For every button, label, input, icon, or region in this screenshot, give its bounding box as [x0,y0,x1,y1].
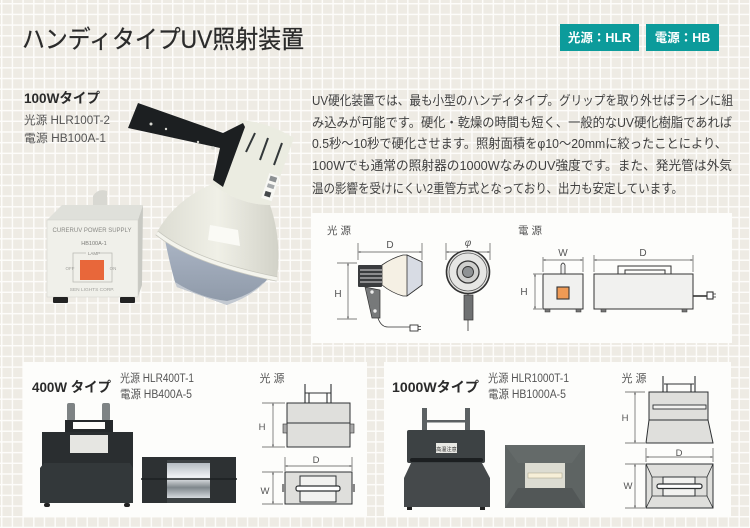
description text: み込みが可能です。硬化・乾燥の時間も短く、一般的なUV硬化樹脂であれば [312,115,732,130]
body cylinder [212,120,294,205]
diagram: lamp front view [446,238,490,331]
label: light source: 光 源 [259,371,285,385]
description text: 0.5秒～10秒で硬化させます。照射面積をφ10～20mmに絞ったことにより、 [312,136,727,151]
badge: power supply HB: 電源：HB [655,30,710,45]
diagram: 400W top view: W [261,486,270,497]
photo: 1000W lamp front [404,408,490,510]
dome [157,184,278,278]
diagram: lamp front view: φ [465,238,472,249]
diagram: 400W side view [259,384,354,447]
model numbers: 100W [24,113,110,145]
description text: 温の影響を受けにくい2重管方式となっており、出力も安定しています。 [312,181,683,196]
dome highlight [208,225,240,246]
photo: 400W lamp opening [141,457,237,503]
diagram: power supply front: W [558,248,568,259]
handle [128,103,245,187]
model numbers: 400W [120,371,194,401]
heading: 400W type: 400W タイプ [32,379,111,395]
diagram: 1000W top view: W [624,481,633,492]
handle screws [150,122,215,150]
photo: 100W power supply [47,190,143,303]
photo: 100W power supply: CURERUV POWER SUPPLY [53,228,131,234]
model numbers: 400W: 光源 HLR400T-1 [120,371,194,385]
diagram: 1000W top view [624,448,713,508]
diagram: power supply front [520,248,583,312]
heading: 1000W type: 1000Wタイプ [392,379,479,395]
photo: 1000W lamp front: 高温注意 [436,445,457,453]
model numbers: 400W: 電源 HB400A-5 [120,387,192,401]
photo: 100W power supply: LAMP [88,251,100,256]
diagram: lamp side view: H [334,289,342,300]
model numbers: 1000W: 光源 HLR1000T-1 [488,371,569,385]
label: power supply: 電 源 [518,224,542,237]
photo: 100W power supply: ON [110,266,116,271]
rim [157,233,277,279]
photo: 100W power supply: OFF [66,266,75,271]
label: light source: 光 源 [621,371,647,385]
photo: 400W lamp front [40,403,133,507]
diagram: 400W top view: D [313,455,320,466]
diagram: 400W top view [261,455,355,504]
model numbers: 100W: 光源 HLR100T-2 [24,113,110,127]
vents [246,133,282,165]
heading: 100W type: 100Wタイプ [24,90,100,106]
sticker [261,173,280,201]
diagram: 400W side view: H [259,422,266,433]
photo: 100W lamp head [128,103,294,305]
glass lip [175,282,264,305]
title: ハンディタイプUV照射装置 [22,26,304,54]
photo: 100W power supply: SEN LIGHTS CORP. [70,287,114,293]
diagram: 1000W side view: H [622,413,629,424]
description text [312,93,733,196]
label: light source: 光 源 [327,224,351,237]
diagram: power supply side: D [639,248,647,259]
diagram: 1000W top view: D [676,448,683,459]
panel: 400W type [23,362,367,517]
photo: 100W power supply: HB100A-1 [81,241,107,247]
photo: 1000W lamp opening [505,445,585,508]
panel: dimension diagrams [311,213,732,343]
badge: light source HLR [560,24,639,51]
badge: light source HLR: 光源：HLR [568,30,631,45]
badge: power supply HB [646,24,719,51]
diagram: lamp side view: D [386,240,394,251]
lower glass [165,240,272,305]
diagram: lamp side view [334,240,422,331]
diagram: power supply side [594,248,716,312]
model numbers: 1000W [488,371,569,401]
model numbers: 100W: 電源 HB100A-1 [24,131,106,145]
description text: 100Wでも通常の照射器の1000WなみのUV強度です。また、発光管は外気 [312,158,732,173]
panel: 1000W type [384,362,731,517]
diagram: 1000W side view [622,376,713,443]
diagram: power supply front: H [520,287,528,298]
model numbers: 1000W: 電源 HB1000A-5 [488,387,566,401]
